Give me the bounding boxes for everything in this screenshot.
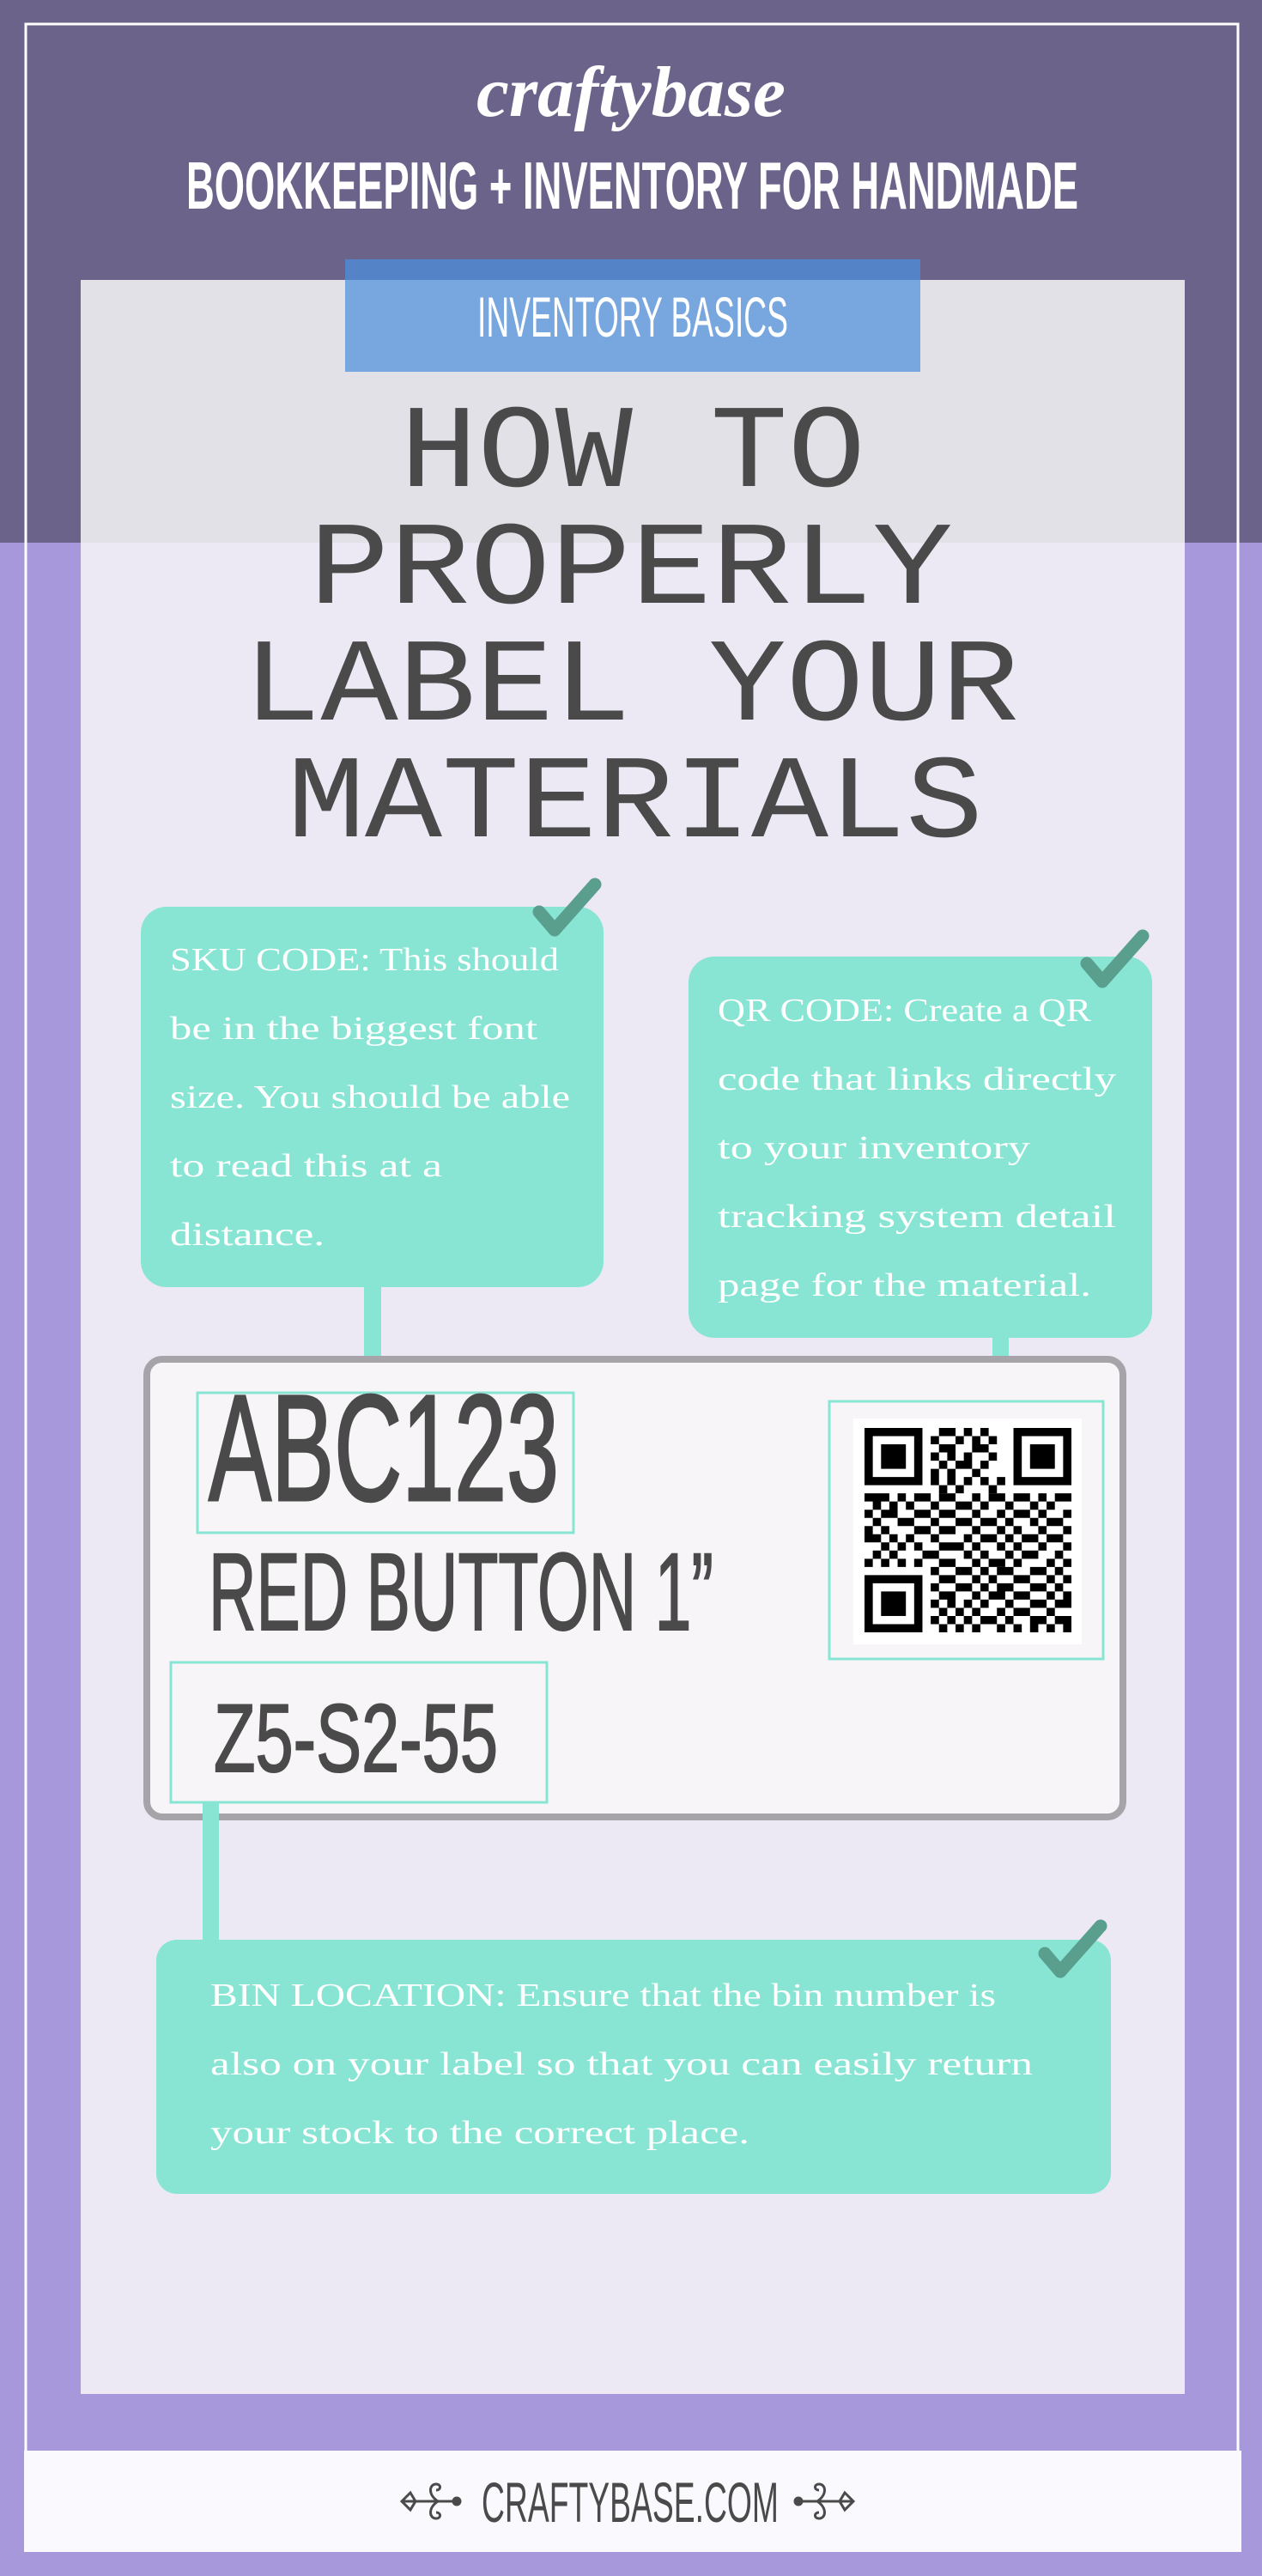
icon: check qr <box>1087 936 1143 981</box>
bin location box <box>171 1662 547 1802</box>
callout: qr code: QR CODE: Create a QR <box>718 993 1092 1029</box>
callout: sku code: distance. <box>170 1217 325 1253</box>
panel: main content <box>81 280 1185 2394</box>
logo: craftybase: craftybase <box>476 52 786 132</box>
callout: sku code: size. You should be able <box>170 1079 570 1115</box>
title <box>243 388 1019 872</box>
label card <box>147 1359 1123 1817</box>
title: MATERIALS <box>288 738 983 872</box>
callout: qr code: to your inventory <box>718 1130 1030 1166</box>
title: HOW TO <box>400 388 865 522</box>
icon: check sku <box>539 884 595 930</box>
callout: qr code: code that links directly <box>718 1061 1116 1097</box>
connector: qr <box>992 1335 1009 1402</box>
icon: check bin <box>1045 1926 1101 1971</box>
title: PROPERLY <box>309 505 953 639</box>
callout: sku code: be in the biggest font <box>170 1011 538 1047</box>
tag: inventory basics <box>345 259 920 372</box>
callout: sku code: SKU CODE: This should <box>170 942 559 978</box>
connector: bin <box>203 1802 219 1941</box>
footer <box>24 2451 1241 2552</box>
callout: bin location: your stock to the correct place. <box>210 2115 749 2151</box>
product name: RED BUTTON 1” <box>209 1531 713 1654</box>
callout: qr code: page for the material. <box>718 1267 1091 1303</box>
tag: inventory basics: INVENTORY BASICS <box>477 285 788 349</box>
icon: right ornament <box>795 2484 853 2518</box>
qr code <box>829 1401 1103 1659</box>
callout: bin location: also on your label so that you can easily return <box>210 2046 1033 2082</box>
title: LABEL YOUR <box>243 622 1019 756</box>
connector: sku <box>364 1284 381 1394</box>
sku code box <box>197 1364 573 1533</box>
callout: qr code: tracking system detail <box>718 1199 1116 1235</box>
bin location box: Z5-S2-55 <box>214 1685 498 1792</box>
icon: left ornament <box>402 2484 460 2518</box>
background top band <box>0 0 1262 543</box>
callout: qr code <box>689 936 1152 1338</box>
footer: CRAFTYBASE.COM <box>482 2470 779 2534</box>
sku code box: ABC123 <box>209 1364 559 1533</box>
callout: sku code: to read this at a <box>170 1148 442 1184</box>
callout: bin location: BIN LOCATION: Ensure that the bin number is <box>210 1978 996 2014</box>
callout: sku code <box>141 884 604 1287</box>
callout: bin location <box>156 1926 1111 2194</box>
